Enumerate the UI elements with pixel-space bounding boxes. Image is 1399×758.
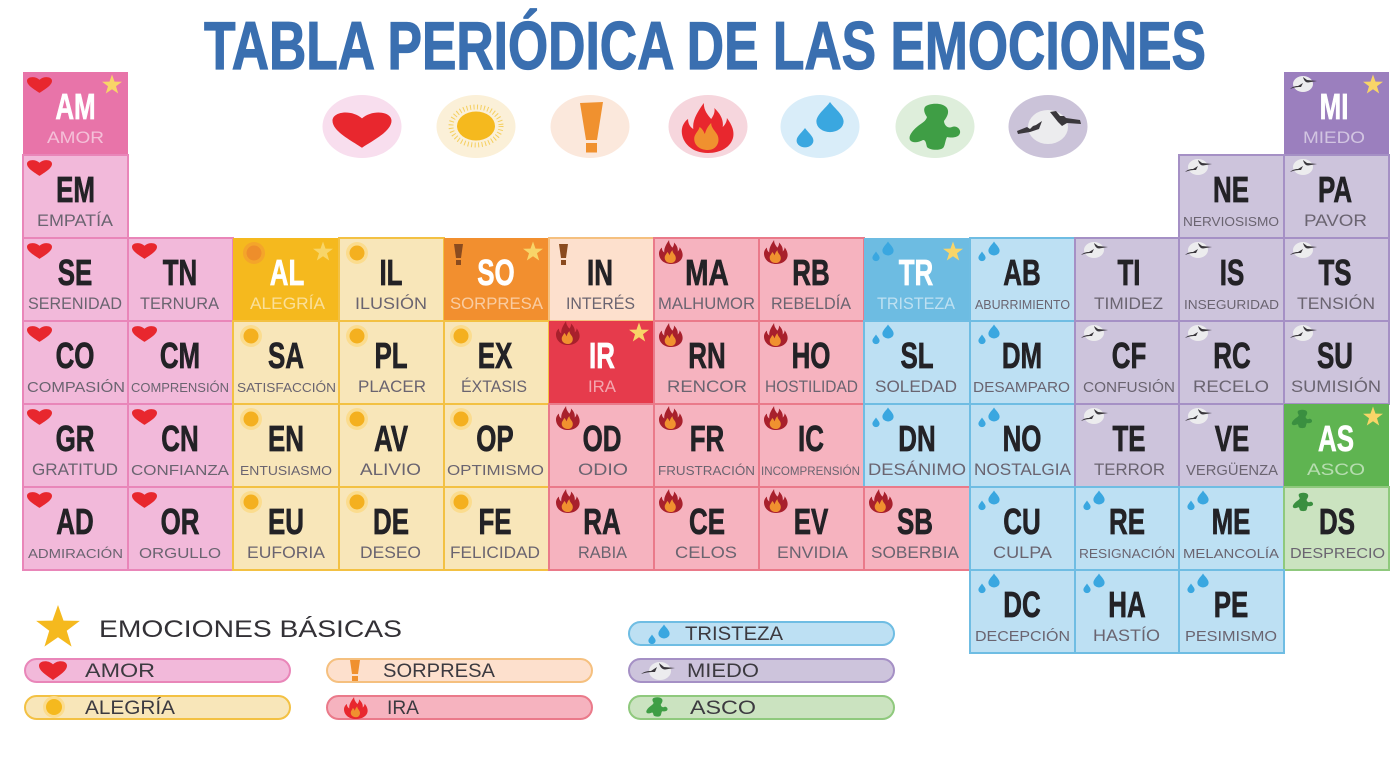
cell: TN Ternura <box>128 238 233 321</box>
cell: EN Entusiasmo: ENTUSIASMO <box>240 464 332 478</box>
cell: RB Rebeldía: REBELDÍA <box>771 294 851 313</box>
legend item: alegría: ALEGRÍA <box>85 698 175 719</box>
cell: RA Rabia: RA <box>583 502 621 542</box>
icon: sun <box>436 95 516 158</box>
cell: RN Rencor: RN <box>688 336 726 376</box>
icon: heart <box>322 95 402 158</box>
cell: DS Desprecio: DS <box>1319 502 1355 542</box>
cell: AL Alegría: AL <box>270 253 304 293</box>
cell: PE Pesimismo <box>1179 570 1284 653</box>
cell: NO Nostalgia <box>970 404 1075 487</box>
cell: AL Alegría <box>233 238 339 321</box>
legend item: tristeza <box>629 622 894 645</box>
cell: IS Inseguridad: INSEGURIDAD <box>1184 298 1279 312</box>
cell: DN Desánimo: DN <box>898 419 936 459</box>
cell: RN Rencor <box>654 321 759 404</box>
cell: TR Tristeza <box>864 238 970 321</box>
cell: FR Frustración: FRUSTRACIÓN <box>658 463 755 478</box>
periodic table <box>23 72 1389 653</box>
cell: TS Tensión <box>1284 238 1389 321</box>
cell: IN Interés: IN <box>587 253 613 293</box>
cell: AS Asco: AS <box>1318 419 1354 459</box>
cell: CF Confusión: CONFUSIÓN <box>1083 379 1175 396</box>
legend <box>25 605 894 719</box>
cell: IL Ilusión <box>339 238 444 321</box>
cell: RE Resignación: RESIGNACIÓN <box>1079 546 1175 561</box>
cell: AM Amor <box>23 72 128 155</box>
legend item: sorpresa: SORPRESA <box>383 661 495 682</box>
cell: NO Nostalgia: NO <box>1003 419 1041 459</box>
legend heading: emociones básicas: EMOCIONES BÁSICAS <box>99 616 402 643</box>
cell: IS Inseguridad <box>1179 238 1284 321</box>
cell: SE Serenidad: SERENIDAD <box>28 295 122 313</box>
cell: CO Compasión: COMPASIÓN <box>27 379 125 396</box>
cell: EV Envidia <box>759 487 864 570</box>
cell: HA Hastío: HA <box>1108 585 1146 625</box>
cell: HO Hostilidad <box>759 321 864 404</box>
cell: RB Rebeldía <box>759 238 864 321</box>
legend item: sorpresa <box>327 659 592 682</box>
cell: DS Desprecio <box>1284 487 1389 570</box>
cell: IC Incomprensión: IC <box>798 419 824 459</box>
icon: bats and moon <box>1008 95 1088 158</box>
cell: AB Aburrimiento: ABURRIMIENTO <box>975 298 1070 312</box>
cell: CE Celos <box>654 487 759 570</box>
cell: DE Deseo: DESEO <box>360 544 421 562</box>
cell: SL Soledad: SOLEDAD <box>875 378 957 396</box>
cell: SU Sumisión: SUMISIÓN <box>1291 377 1381 396</box>
cell: RC Recelo: RECELO <box>1193 378 1269 396</box>
cell: DS Desprecio: DESPRECIO <box>1290 545 1385 562</box>
cell: IC Incomprensión: INCOMPRENSIÓN <box>761 465 860 478</box>
cell: CF Confusión <box>1075 321 1179 404</box>
cell: SU Sumisión <box>1284 321 1389 404</box>
cell: IN Interés <box>549 238 654 321</box>
cell: HO Hostilidad: HOSTILIDAD <box>765 378 858 396</box>
cell: CF Confusión: CF <box>1112 336 1146 376</box>
cell: CM Comprensión: CM <box>160 336 200 376</box>
cell: HO Hostilidad: HO <box>792 336 830 376</box>
cell: PE Pesimismo: PESIMISMO <box>1185 628 1277 645</box>
cell: TR Tristeza: TRISTEZA <box>877 295 955 313</box>
legend item: tristeza: TRISTEZA <box>685 624 783 645</box>
cell: AV Alivio: AV <box>374 419 408 459</box>
cell: RB Rebeldía: RB <box>792 253 830 293</box>
cell: IC Incomprensión <box>759 404 864 487</box>
cell: DE Deseo: DE <box>373 502 409 542</box>
cell: SA Satisfacción: SA <box>268 336 304 376</box>
cell: CU Culpa: CULPA <box>993 544 1052 562</box>
cell: CE Celos: CE <box>689 502 725 542</box>
cell: SO Sorpresa: SORPRESA <box>450 295 543 313</box>
cell: TN Ternura: TERNURA <box>140 295 219 313</box>
legend item: ira <box>327 696 592 719</box>
cell: FR Frustración: FR <box>690 419 724 459</box>
cell: OR Orgullo <box>128 487 233 570</box>
cell: AS Asco <box>1284 404 1389 487</box>
cell: RE Resignación <box>1075 487 1179 570</box>
cell: DC Decepción <box>970 570 1075 653</box>
cell: IN Interés: INTERÉS <box>566 294 635 313</box>
cell: OD Odio: OD <box>583 419 621 459</box>
cell: GR Gratitud <box>23 404 128 487</box>
cell: OP Optimismo: OPTIMISMO <box>447 462 544 479</box>
cell: PA Pavor: PA <box>1318 170 1352 210</box>
legend item: miedo <box>629 659 894 682</box>
cell: FE Felicidad: FE <box>478 502 512 542</box>
cell: AD Admiración: AD <box>56 502 94 542</box>
cell: EU Euforia: EUFORIA <box>247 544 325 562</box>
cell: ME Melancolía: MELANCOLÍA <box>1183 546 1280 561</box>
cell: TI Timidez: TI <box>1117 253 1141 293</box>
cell: SO Sorpresa: SO <box>477 253 515 293</box>
cell: EU Euforia: EU <box>268 502 304 542</box>
cell: EU Euforia <box>233 487 339 570</box>
cell: SL Soledad <box>864 321 970 404</box>
cell: CN Confianza: CN <box>161 419 199 459</box>
cell: EX Éxtasis <box>444 321 549 404</box>
cell: DC Decepción: DC <box>1003 585 1041 625</box>
cell: MI Miedo: MIEDO <box>1303 129 1365 147</box>
cell: DM Desamparo <box>970 321 1075 404</box>
legend item: ira: IRA <box>387 698 419 719</box>
cell: CN Confianza <box>128 404 233 487</box>
cell: DN Desánimo <box>864 404 970 487</box>
cell: AD Admiración: ADMIRACIÓN <box>28 546 123 561</box>
cell: CM Comprensión: COMPRENSIÓN <box>131 380 229 395</box>
cell: PA Pavor <box>1284 155 1389 238</box>
legend item: miedo: MIEDO <box>687 661 759 682</box>
cell: SE Serenidad: SE <box>58 253 92 293</box>
cell: TN Ternura: TN <box>163 253 197 293</box>
cell: DC Decepción: DECEPCIÓN <box>975 628 1070 645</box>
cell: CU Culpa: CU <box>1003 502 1041 542</box>
cell: SA Satisfacción <box>233 321 339 404</box>
cell: SE Serenidad <box>23 238 128 321</box>
cell: NE Nerviosismo: NERVIOSISMO <box>1183 215 1279 229</box>
cell: IL Ilusión: ILUSIÓN <box>355 294 427 313</box>
legend item: amor <box>25 659 290 682</box>
cell: FE Felicidad: FELICIDAD <box>450 544 540 562</box>
cell: MA Malhumor: MA <box>685 253 729 293</box>
cell: MA Malhumor: MALHUMOR <box>658 295 755 313</box>
icon: exclamation mark <box>550 95 630 158</box>
cell: DN Desánimo: DESÁNIMO <box>868 460 966 479</box>
cell: PA Pavor: PAVOR <box>1304 212 1367 230</box>
cell: MI Miedo <box>1284 72 1389 155</box>
cell: CO Compasión <box>23 321 128 404</box>
cell: SB Soberbia: SB <box>897 502 933 542</box>
cell: RA Rabia <box>549 487 654 570</box>
cell: HA Hastío: HASTÍO <box>1093 626 1160 645</box>
cell: TI Timidez: TIMIDEZ <box>1094 295 1163 313</box>
cell: NE Nerviosismo: NE <box>1213 170 1249 210</box>
cell: TE Terror: TE <box>1112 419 1146 459</box>
cell: NO Nostalgia: NOSTALGIA <box>974 461 1071 479</box>
cell: TE Terror: TERROR <box>1094 461 1165 479</box>
cell: DE Deseo <box>339 487 444 570</box>
cell: EV Envidia: ENVIDIA <box>777 544 848 562</box>
cell: CU Culpa <box>970 487 1075 570</box>
cell: DM Desamparo: DM <box>1002 336 1042 376</box>
cell: RE Resignación: RE <box>1109 502 1145 542</box>
cell: DM Desamparo: DESAMPARO <box>973 379 1070 396</box>
cell: AL Alegría: ALEGRÍA <box>250 294 325 313</box>
cell: RC Recelo <box>1179 321 1284 404</box>
cell: GR Gratitud: GR <box>56 419 94 459</box>
cell: OR Orgullo: ORGULLO <box>139 545 221 562</box>
cell: AB Aburrimiento: AB <box>1003 253 1041 293</box>
cell: FR Frustración <box>654 404 759 487</box>
cell: PL Placer: PLACER <box>358 378 426 396</box>
cell: VE Vergüenza: VERGÜENZA <box>1186 461 1278 479</box>
cell: EX Éxtasis: ÉXTASIS <box>461 377 527 396</box>
cell: TE Terror <box>1075 404 1179 487</box>
icon: green splat <box>896 95 974 158</box>
cell: FE Felicidad <box>444 487 549 570</box>
cell: SU Sumisión: SU <box>1317 336 1353 376</box>
icon row <box>322 95 1088 158</box>
cell: AD Admiración <box>23 487 128 570</box>
icon: fire <box>668 95 748 158</box>
cell: OD Odio <box>549 404 654 487</box>
cell: OP Optimismo: OP <box>476 419 514 459</box>
cell: OR Orgullo: OR <box>161 502 199 542</box>
cell: ME Melancolía <box>1179 487 1284 570</box>
cell: EM Empatía <box>23 155 128 238</box>
cell: AB Aburrimiento <box>970 238 1075 321</box>
cell: CM Comprensión <box>128 321 233 404</box>
cell: EM Empatía: EM <box>56 170 95 210</box>
cell: MA Malhumor <box>654 238 759 321</box>
legend item: asco <box>629 696 894 719</box>
cell: IS Inseguridad: IS <box>1220 253 1244 293</box>
cell: RN Rencor: RENCOR <box>667 378 747 396</box>
cell: EX Éxtasis: EX <box>478 336 512 376</box>
cell: PL Placer: PL <box>374 336 408 376</box>
cell: AM Amor: AMOR <box>47 129 104 147</box>
cell: VE Vergüenza <box>1179 404 1284 487</box>
cell: PL Placer <box>339 321 444 404</box>
cell: TS Tensión: TENSIÓN <box>1297 294 1375 313</box>
cell: TR Tristeza: TR <box>899 253 933 293</box>
cell: IR Ira: IR <box>589 336 615 376</box>
cell: AM Amor: AM <box>55 87 96 127</box>
cell: TS Tensión: TS <box>1318 253 1352 293</box>
cell: GR Gratitud: GRATITUD <box>32 461 118 479</box>
cell: AS Asco: ASCO <box>1307 461 1365 479</box>
cell: IR Ira: IRA <box>588 378 616 396</box>
legend item: alegría <box>25 696 290 719</box>
cell: IL Ilusión: IL <box>379 253 403 293</box>
cell: CE Celos: CELOS <box>675 544 737 562</box>
cell: MI Miedo: MI <box>1320 87 1348 127</box>
legend heading: emociones básicas <box>36 605 402 647</box>
cell: SO Sorpresa <box>444 238 549 321</box>
cell: SL Soledad: SL <box>900 336 934 376</box>
cell: NE Nerviosismo <box>1179 155 1284 238</box>
cell: EV Envidia: EV <box>794 502 828 542</box>
cell: SB Soberbia: SOBERBIA <box>871 544 959 562</box>
cell: VE Vergüenza: VE <box>1215 419 1249 459</box>
cell: TI Timidez <box>1075 238 1179 321</box>
cell: SA Satisfacción: SATISFACCIÓN <box>237 380 336 395</box>
cell: HA Hastío <box>1075 570 1179 653</box>
cell: SB Soberbia <box>864 487 970 570</box>
cell: AV Alivio: ALIVIO <box>360 461 421 479</box>
cell: ME Melancolía: ME <box>1212 502 1250 542</box>
legend item: amor: AMOR <box>85 661 155 682</box>
cell: AV Alivio <box>339 404 444 487</box>
cell: RC Recelo: RC <box>1213 336 1251 376</box>
cell: EN Entusiasmo <box>233 404 339 487</box>
cell: OD Odio: ODIO <box>578 461 628 479</box>
cell: PE Pesimismo: PE <box>1214 585 1248 625</box>
legend item: asco: ASCO <box>690 698 756 719</box>
cell: EN Entusiasmo: EN <box>268 419 304 459</box>
icon: water drops <box>780 95 860 158</box>
cell: EM Empatía: EMPATÍA <box>37 211 113 230</box>
cell: OP Optimismo <box>444 404 549 487</box>
cell: IR Ira <box>549 321 654 404</box>
cell: RA Rabia: RABIA <box>578 544 627 562</box>
cell: CO Compasión: CO <box>56 336 94 376</box>
cell: CN Confianza: CONFIANZA <box>131 462 229 479</box>
